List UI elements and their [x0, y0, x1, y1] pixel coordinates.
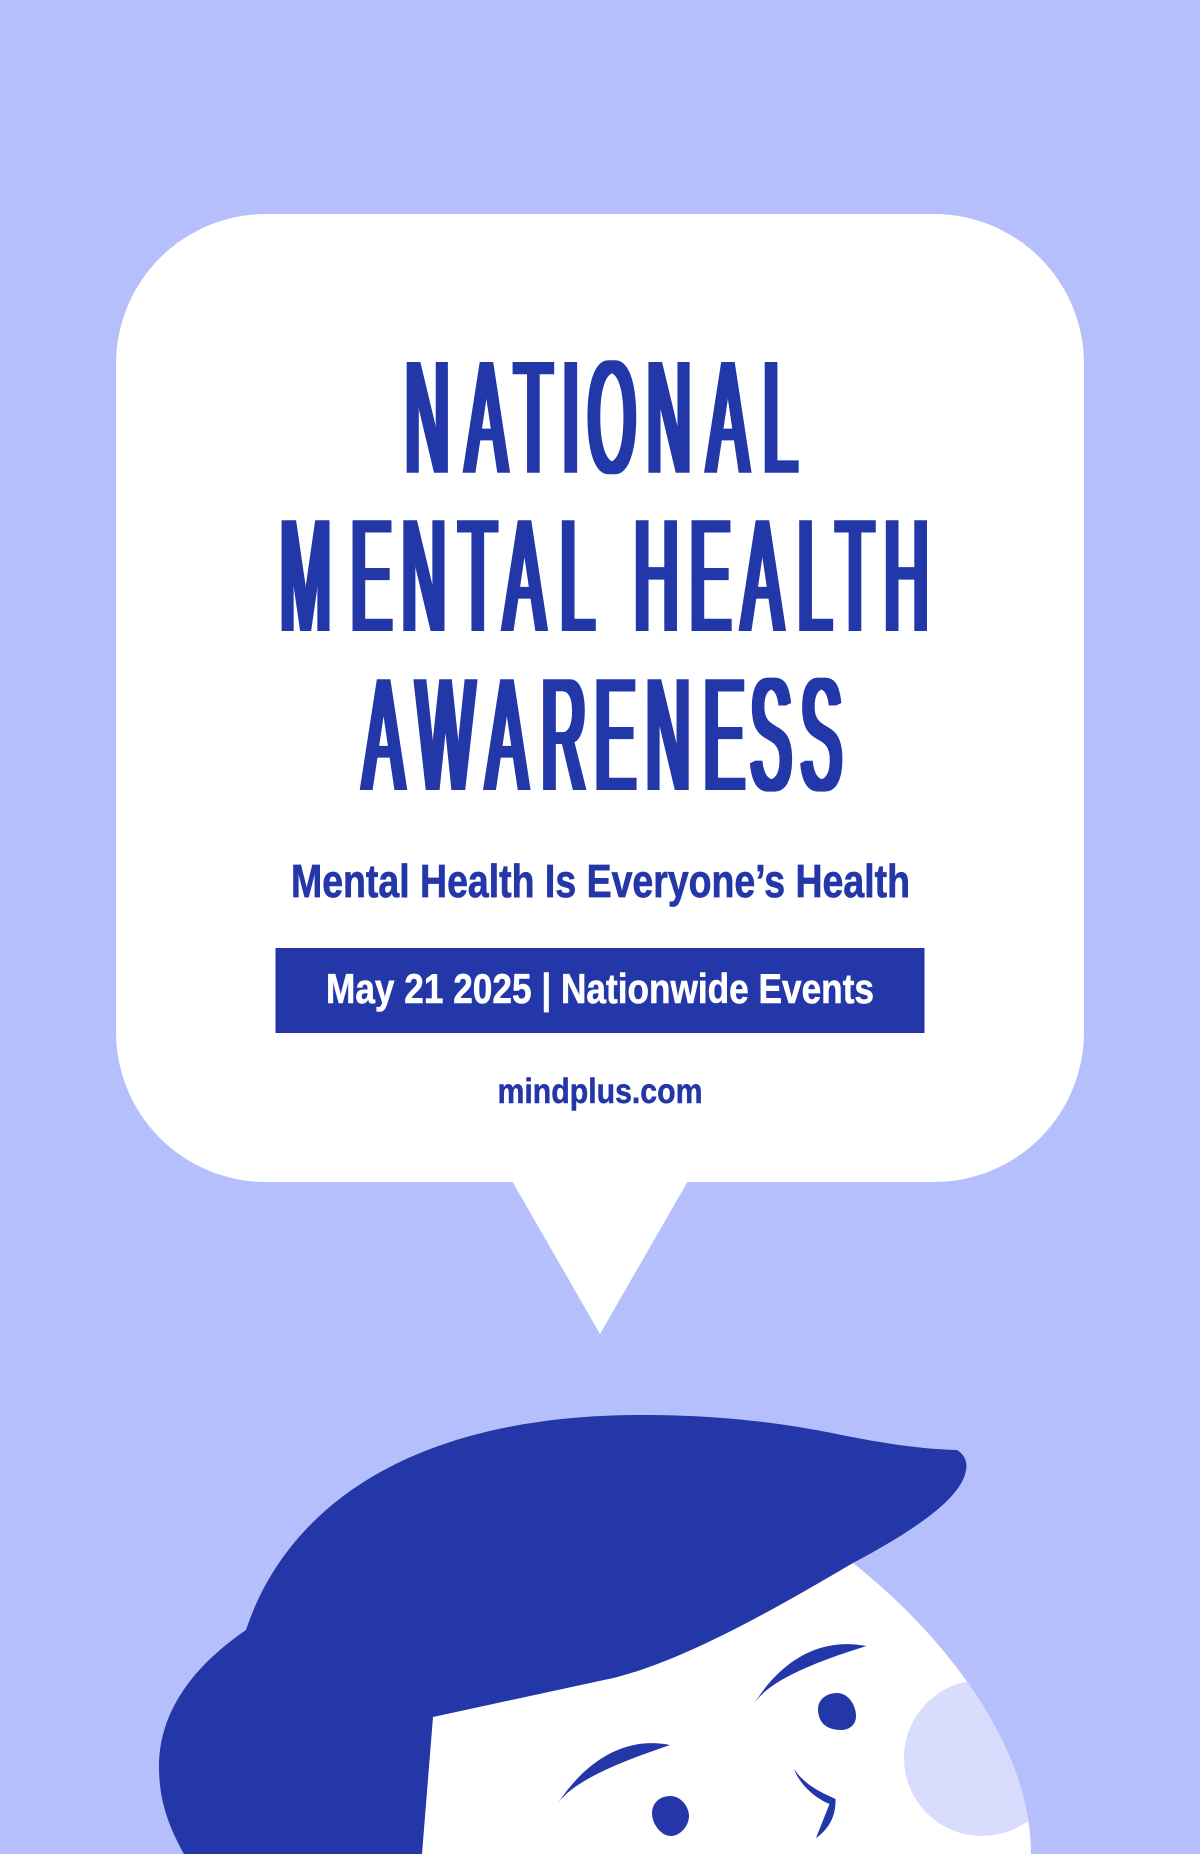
nose: [794, 1769, 836, 1838]
cheek: [904, 1682, 1028, 1836]
website: mindplus.com: [498, 1072, 702, 1111]
right eyebrow: [754, 1644, 866, 1703]
right eye: [818, 1693, 856, 1730]
date banner: [276, 948, 924, 1033]
subtitle: Mental Health Is Everyone’s Health: [291, 855, 910, 907]
speech bubble: [116, 214, 1084, 1334]
illustration: character face: [159, 1415, 1060, 1854]
banner text: May 21 2025 | Nationwide Events: [326, 965, 874, 1013]
face: [422, 1563, 1031, 1854]
title line: Awareness: AWARENESS: [363, 645, 842, 824]
title line: National: NATIONAL: [405, 327, 797, 507]
hair: [159, 1415, 967, 1854]
left eye: [652, 1796, 689, 1836]
title: [280, 327, 928, 824]
left eyebrow: [558, 1743, 670, 1803]
title line: Mental Health: MENTAL HEALTH: [280, 486, 928, 665]
